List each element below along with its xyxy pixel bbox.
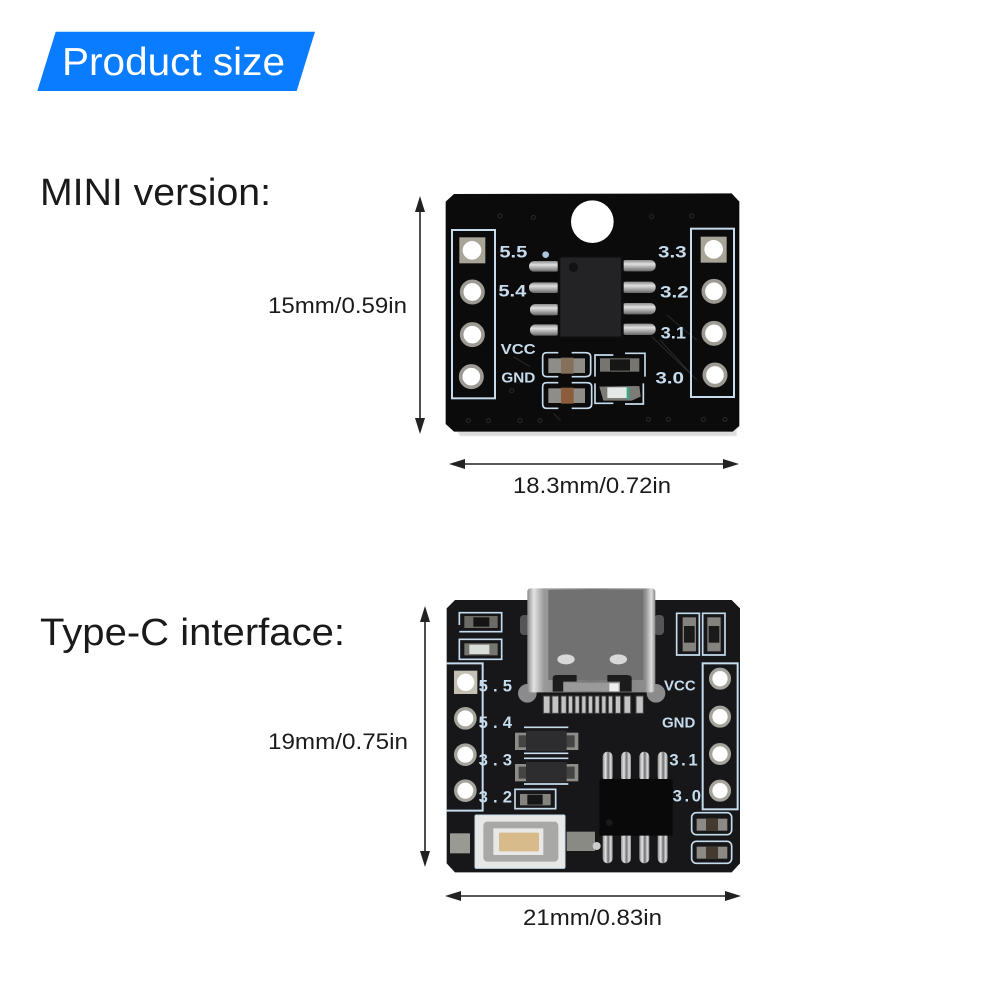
IC pins — [603, 752, 668, 863]
silkscreen labels: 3.2 — [479, 788, 512, 807]
silkscreen labels: 5.4 — [479, 713, 513, 732]
SMD outlines — [543, 353, 645, 408]
silkscreen labels — [479, 676, 701, 807]
heading: MINI version: MINI version: — [40, 172, 271, 214]
MINI height label: 15mm/0.59in — [268, 293, 407, 318]
heading: Type-C interface: Type-C interface: — [40, 612, 345, 654]
header outlines — [452, 229, 734, 398]
IC chip — [599, 779, 673, 836]
MINI width arrow — [449, 459, 739, 469]
header pads — [459, 237, 727, 387]
silkscreen labels: 3.0 — [655, 368, 684, 387]
small resistor — [515, 789, 556, 809]
diodes — [515, 727, 578, 784]
silkscreen labels: 3.1 — [661, 324, 686, 343]
silkscreen labels: 3.3 — [658, 242, 687, 261]
USB-C connector — [518, 588, 665, 703]
mounting hole — [571, 200, 614, 243]
Type-C height label: 19mm/0.75in — [268, 729, 408, 754]
Type-C width label: 21mm/0.83in — [523, 905, 662, 930]
silkscreen labels: GND — [662, 715, 695, 731]
top-right resistors — [677, 613, 725, 655]
MINI height arrow — [415, 196, 425, 434]
silkscreen labels: 5.5 — [499, 242, 527, 261]
silkscreen labels: VCC — [501, 342, 536, 358]
header pads — [454, 669, 729, 800]
silkscreen labels: 3.0 — [673, 787, 701, 806]
banner: Product size — [37, 32, 315, 91]
IC pins — [529, 260, 656, 336]
MINI width label: 18.3mm/0.72in — [513, 473, 671, 498]
silkscreen labels: 3.3 — [479, 750, 512, 769]
silkscreen labels: GND — [501, 371, 535, 387]
header outlines — [447, 663, 738, 811]
bottom-right capacitors — [692, 813, 732, 863]
IC chip — [558, 255, 624, 339]
SMD components — [548, 358, 641, 404]
tactile button — [450, 815, 601, 868]
silkscreen labels: VCC — [664, 679, 696, 695]
silkscreen labels — [498, 242, 689, 387]
banner: Product size: Product size — [62, 41, 285, 84]
silkscreen labels: 3.2 — [660, 282, 689, 301]
silkscreen labels: 5.5 — [479, 676, 512, 695]
traces and vias — [466, 214, 727, 423]
silkscreen labels: 5.4 — [498, 282, 527, 301]
top-left SMD parts — [459, 613, 502, 659]
Type-C height arrow — [420, 606, 430, 867]
USB pins — [543, 696, 643, 713]
Type-C PCB board — [447, 588, 740, 872]
Type-C width arrow — [445, 891, 741, 901]
MINI PCB board — [446, 193, 739, 436]
silkscreen labels: 3.1 — [669, 750, 698, 769]
